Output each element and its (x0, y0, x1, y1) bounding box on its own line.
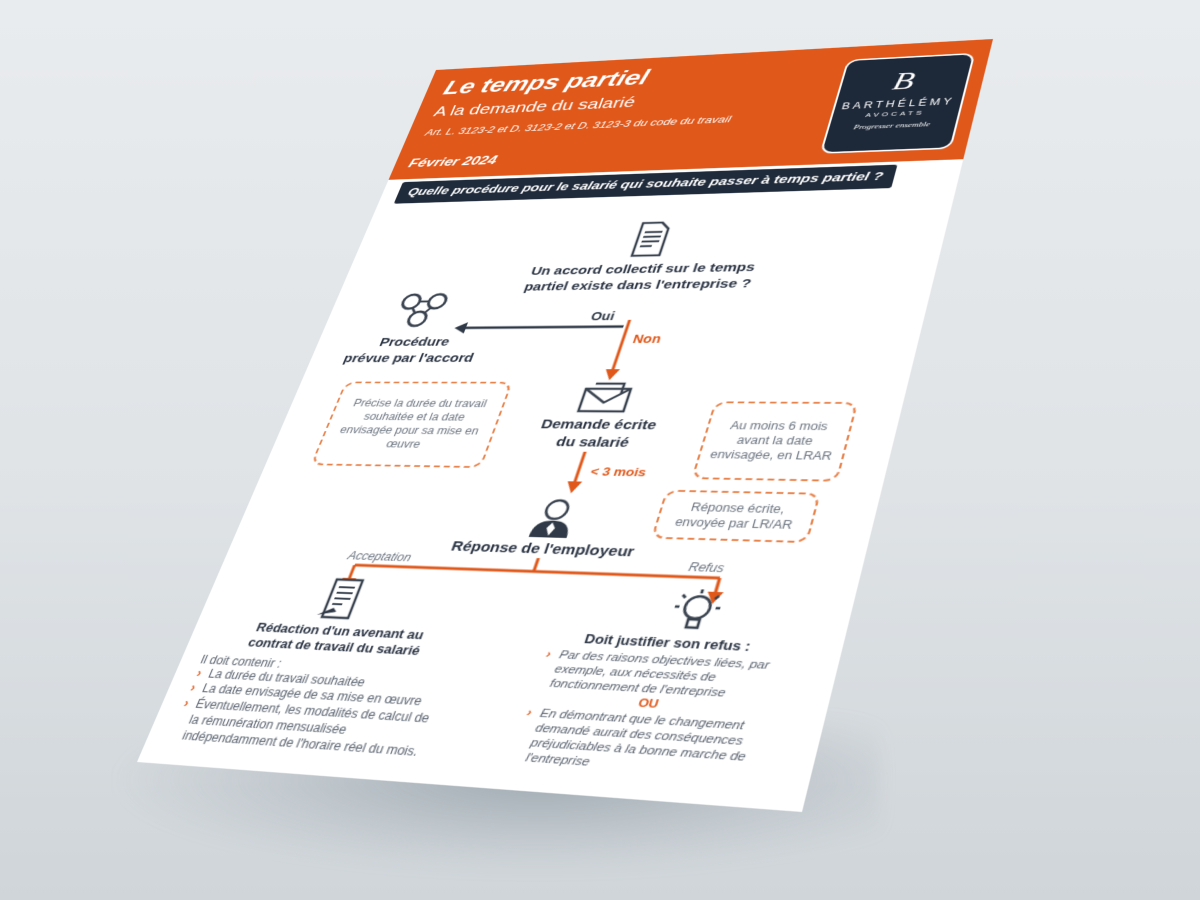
icon: document (630, 221, 670, 258)
logo: BARTHÉLÉMY (840, 96, 956, 112)
heading: justifier refus: Doit justifier son refus : (583, 631, 753, 654)
list: justifications: Par des raisons objectives liées, par exemple, aux nécessités de fonctionnement de l'entreprise (548, 649, 771, 699)
block: refus (524, 631, 772, 769)
question banner: Quelle procédure pour le salarié qui souhaite passer à temps partiel ? (406, 170, 885, 198)
callout: response: Réponse écrite, envoyée par LR/AR (673, 500, 794, 532)
icon: envelope (576, 382, 634, 414)
text: réponse employeur: Réponse de l'employeur (449, 538, 636, 560)
branch arrows: Refus (687, 561, 726, 575)
title: Le temps partiel (440, 66, 652, 99)
branch arrows (342, 550, 726, 604)
text: procédure prévue: Procédure (377, 335, 452, 349)
callout: right: Au moins 6 mois avant la date envisagée, en LRAR (708, 419, 833, 463)
icon: contract (316, 577, 366, 620)
heading: rédaction avenant: Rédaction d'un avenant au (254, 620, 426, 642)
icon: gears (400, 292, 448, 328)
callout: left: Précise la durée du travail souhaitée et la date envisagée pour sa mise en œuvre (338, 397, 489, 450)
list: contenu avenant: Éventuellement, les modalités de calcul de la rémunération mensualisée indépendamment de l'horaire réel du mois. (180, 697, 432, 759)
floor shadow (120, 720, 880, 870)
list: contenu avenant (180, 652, 432, 759)
logo: B (890, 67, 918, 95)
list: contenu avenant: La durée du travail souhaitée (206, 666, 368, 689)
logo: Progresser ensemble (853, 120, 931, 131)
list: contenu avenant: Il doit contenir : (198, 652, 284, 670)
question banner (394, 165, 897, 204)
text: demande écrite: du salarié (554, 434, 631, 450)
paper sheet (137, 39, 993, 812)
callout: left (310, 382, 513, 468)
arrow: non (605, 320, 663, 380)
logo (820, 53, 975, 154)
block: acceptation (180, 620, 432, 759)
list: justifications: OU (636, 698, 660, 711)
arrow: 3 mois (567, 400, 670, 496)
arrow: oui (454, 310, 624, 334)
list: justifications (524, 649, 772, 769)
date: Février 2024 (406, 153, 499, 170)
text: demande écrite: Demande écrite (539, 417, 659, 433)
icon: lightbulb (674, 589, 721, 630)
text: procédure prévue (341, 335, 476, 365)
legal reference: Art. L. 3123-2 et D. 3123-2 et D. 3123-3 du code du travail (424, 113, 733, 138)
heading: rédaction avenant (246, 620, 426, 658)
logo: AVOCATS (865, 109, 926, 119)
subtitle: A la demande du salarié (431, 94, 638, 120)
branch arrows: Acceptation (346, 550, 413, 564)
callout: right (691, 401, 858, 482)
question text: Un accord collectif sur le temps partiel existe dans l'entreprise ? (522, 260, 757, 293)
arrow: 3 mois: < 3 mois (588, 466, 648, 480)
arrow: non: Non (631, 333, 663, 346)
heading: rédaction avenant: contrat de travail du salarié (246, 635, 422, 658)
text: procédure prévue: prévue par l'accord (341, 351, 476, 365)
arrow: oui: Oui (589, 310, 616, 323)
callout: response (651, 490, 821, 543)
header band (389, 39, 993, 180)
list: justifications: En démontrant que le changement demandé aurait des conséquences préjudiciables à la bonne marche de l'entreprise (524, 708, 747, 769)
icon: employer (528, 494, 670, 538)
text: demande écrite (539, 417, 659, 450)
list: contenu avenant: La date envisagée de sa mise en œuvre (200, 682, 424, 709)
